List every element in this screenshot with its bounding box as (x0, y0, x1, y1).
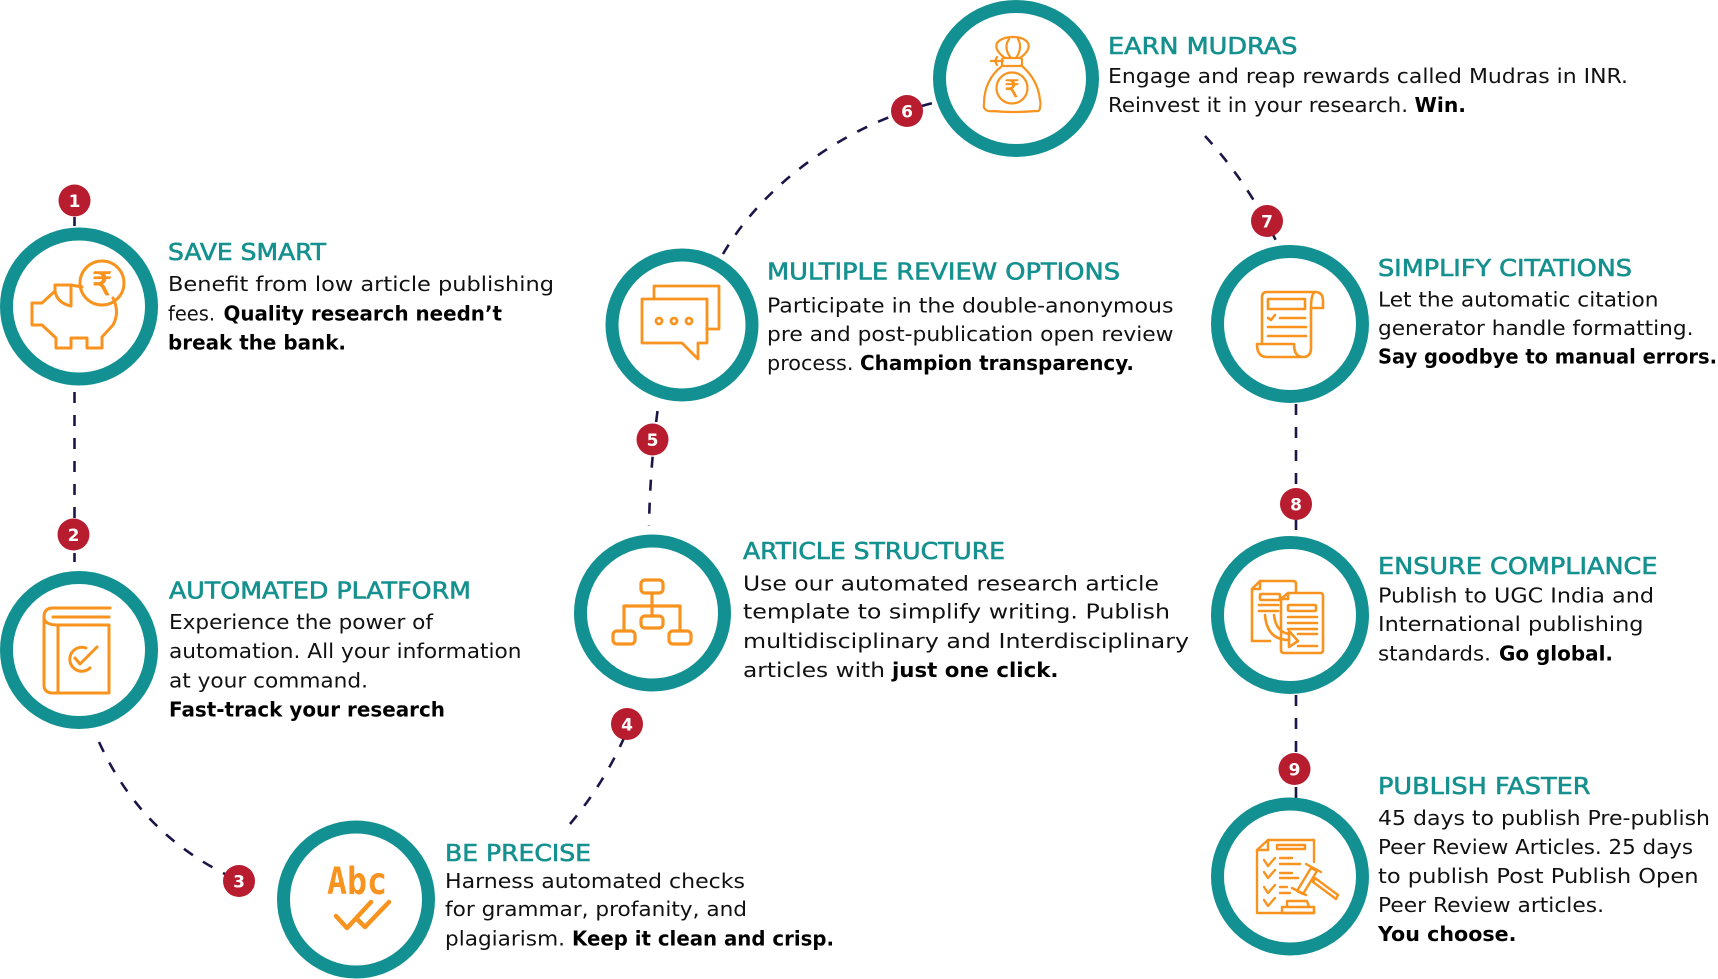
step badge 1: 1 (69, 192, 80, 212)
text: article structure: multidisciplinary and Interdisciplinary (743, 629, 1189, 653)
text: simplify citations: generator handle formatting. (1378, 316, 1694, 340)
text: article structure (743, 572, 1189, 682)
step badge 8: 8 (1290, 496, 1302, 516)
text: save smart (168, 272, 554, 354)
step badge 7: 7 (1261, 212, 1273, 232)
icon ring: simplify citations (1218, 252, 1362, 396)
step badge 9: 9 (1289, 760, 1300, 780)
text: publish faster: Peer Review Articles. 25 days (1378, 835, 1693, 859)
icon: abc with double check: Abc (327, 860, 387, 903)
heading: earn mudras: EARN MUDRAS (1108, 34, 1298, 60)
text: automated platform: at your command. (169, 668, 368, 692)
panel: be precise (223, 827, 834, 972)
text: multiple review options: Participate in the double-anonymous (767, 294, 1174, 318)
icon: money bag: ₹ (1004, 75, 1020, 103)
heading: be precise: BE PRECISE (445, 841, 591, 867)
text: publish faster (1377, 806, 1710, 946)
step badge 5 (636, 424, 668, 456)
heading: multiple review options: MULTIPLE REVIEW OPTIONS (767, 260, 1120, 286)
icon: piggy bank with rupee coin (32, 261, 124, 348)
text: be precise (445, 869, 834, 950)
text: save smart: break the bank. (168, 330, 346, 354)
step badge 2 (58, 518, 90, 550)
text: multiple review options: process. (767, 351, 854, 375)
icon: org chart (613, 580, 691, 644)
text: automated platform (169, 610, 522, 722)
icon ring: publish faster (1218, 804, 1362, 949)
panel: multiple review options (612, 255, 1174, 456)
panel: article structure (580, 539, 1189, 740)
text: publish faster: to publish Post Publish Open (1378, 864, 1698, 888)
text: ensure compliance (1378, 584, 1654, 666)
panel: ensure compliance (1218, 488, 1658, 688)
icon: scroll document (1257, 292, 1323, 357)
step badge 6 (891, 95, 923, 127)
text: publish faster: You choose. (1377, 922, 1516, 946)
heading: ensure compliance: ENSURE COMPLIANCE (1378, 554, 1658, 580)
icon: abc with double check (327, 860, 389, 928)
text: save smart: Quality research needn’t (224, 302, 502, 326)
text: article structure: template to simplify writing. Publish (743, 600, 1170, 624)
step badge 4: 4 (621, 716, 633, 736)
icon: chat bubbles (642, 286, 719, 359)
text: article structure: just one click. (891, 658, 1058, 682)
text: earn mudras (1108, 64, 1628, 117)
text: publish faster: 45 days to publish Pre-publish (1378, 806, 1710, 830)
step badge 6: 6 (901, 102, 913, 122)
text: article structure: Use our automated research article (743, 572, 1159, 596)
text: ensure compliance: standards. (1378, 642, 1491, 666)
text: multiple review options: pre and post-publication open review (767, 322, 1174, 346)
icon: checklist and gavel (1257, 840, 1338, 913)
icon ring: multiple review options (612, 255, 752, 395)
heading: simplify citations: SIMPLIFY CITATIONS (1378, 256, 1632, 282)
text: automated platform: automation. All your information (169, 639, 522, 663)
text: earn mudras: Win. (1414, 93, 1466, 117)
panel: earn mudras (891, 6, 1628, 150)
step badge 3: 3 (233, 872, 245, 892)
icon: documents with arrow (1252, 581, 1323, 653)
panel: publish faster (1218, 753, 1710, 949)
step badge 3 (223, 865, 255, 897)
text: article structure: articles with (743, 658, 885, 682)
icon ring: save smart (6, 234, 152, 379)
text: save smart: Benefit from low article publishing (168, 272, 554, 296)
step badge 9 (1278, 753, 1310, 785)
icon ring: be precise (284, 827, 428, 972)
text: be precise: plagiarism. (445, 926, 565, 950)
text: earn mudras: Reinvest it in your research. (1108, 93, 1408, 117)
connecting dashed path (74, 102, 1296, 891)
text: simplify citations (1378, 288, 1717, 368)
step badge 4 (611, 708, 643, 740)
heading: article structure: ARTICLE STRUCTURE (743, 539, 1005, 565)
step badge 2: 2 (68, 526, 79, 546)
icon ring: automated platform (6, 578, 152, 722)
icon ring: earn mudras (940, 6, 1092, 150)
icon ring: article structure (580, 541, 724, 685)
text: be precise: for grammar, profanity, and (445, 897, 747, 921)
text: ensure compliance: Publish to UGC India and (1378, 584, 1654, 608)
text: automated platform: Experience the power of (169, 610, 434, 634)
text: automated platform: Fast-track your research (169, 698, 445, 722)
text: publish faster: Peer Review articles. (1378, 893, 1604, 917)
step badge 5: 5 (647, 431, 658, 451)
text: earn mudras: Engage and reap rewards called Mudras in INR. (1108, 64, 1628, 88)
icon: piggy bank with rupee coin: ₹ (92, 265, 112, 303)
text: ensure compliance: Go global. (1499, 642, 1613, 666)
icon ring: ensure compliance (1218, 542, 1362, 688)
text: multiple review options: Champion transparency. (860, 351, 1134, 375)
step badge 1 (58, 184, 90, 216)
text: be precise: Keep it clean and crisp. (572, 926, 834, 950)
step badge 8 (1280, 488, 1312, 520)
heading: publish faster: PUBLISH FASTER (1378, 774, 1591, 800)
text: be precise: Harness automated checks (445, 869, 745, 893)
text: save smart: fees. (168, 302, 215, 326)
panel: simplify citations (1218, 205, 1717, 396)
panel: automated platform (6, 518, 522, 722)
text: simplify citations: Let the automatic citation (1378, 288, 1658, 312)
text: ensure compliance: International publishing (1378, 612, 1644, 636)
icon: money bag (984, 37, 1040, 112)
text: multiple review options (767, 294, 1174, 375)
heading: save smart: SAVE SMART (168, 240, 327, 266)
panel: save smart (6, 184, 554, 379)
icon: book with check (44, 608, 110, 693)
heading: automated platform: AUTOMATED PLATFORM (169, 578, 471, 604)
step badge 7 (1251, 205, 1283, 237)
